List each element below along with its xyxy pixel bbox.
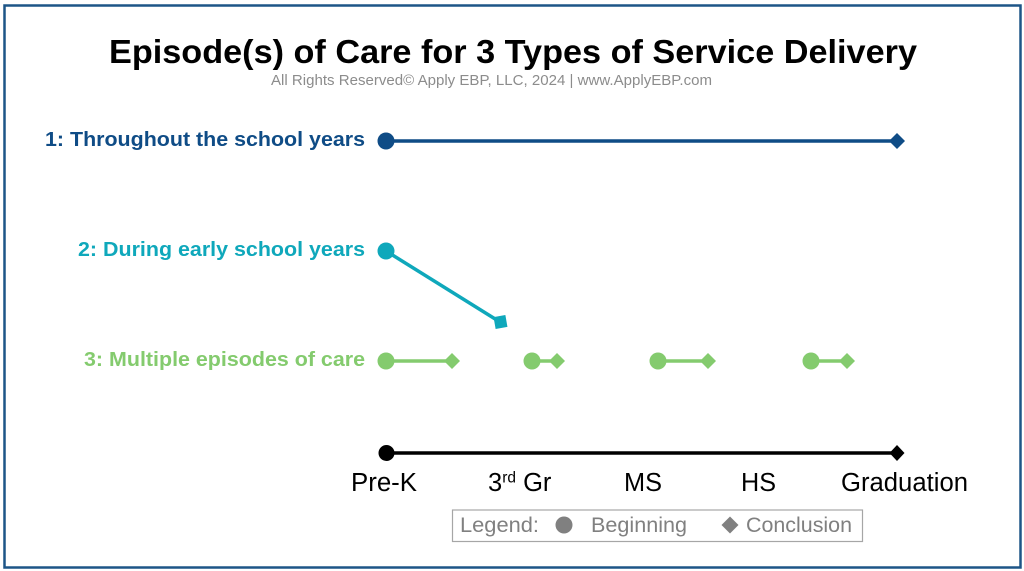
episode 3	[650, 352, 716, 370]
axis label: 3rd Gr: rd	[502, 470, 516, 486]
row 1: throughout the school years	[45, 129, 905, 151]
episode 2	[524, 352, 565, 370]
title: Episode(s) of Care for 3 Types of Service Delivery	[109, 34, 917, 71]
episode 4	[802, 352, 855, 370]
legend text: beginning: Beginning	[591, 513, 687, 537]
copyright subtitle: All Rights Reserved© Apply EBP, LLC, 2024 | www.ApplyEBP.com	[271, 73, 712, 89]
row 2: during early school years	[78, 239, 507, 329]
axis label: Graduation: Graduation	[841, 469, 968, 497]
axis label: MS: MS	[624, 469, 662, 497]
episode 1	[378, 352, 460, 370]
legend title: Legend:	[460, 513, 539, 537]
row 1 label: 1: Throughout the school years	[45, 129, 365, 151]
time axis	[378, 445, 904, 461]
row 3 label: 3: Multiple episodes of care	[84, 349, 365, 371]
row 1 timeline	[378, 132, 905, 150]
axis label: Pre-K: Pre-K	[351, 469, 417, 497]
row 3: multiple episodes of care	[84, 349, 855, 371]
legend	[452, 510, 862, 542]
row 2 timeline	[378, 242, 507, 329]
axis label: HS: HS	[741, 469, 776, 497]
row 2 label: 2: During early school years	[78, 239, 365, 261]
axis label: 3rd Gr: 3	[488, 469, 502, 497]
legend icon: circle	[556, 516, 572, 534]
axis label: 3rd Gr: Gr	[516, 469, 552, 497]
legend icon: diamond	[722, 516, 738, 534]
legend text: conclusion: Conclusion	[746, 513, 852, 537]
